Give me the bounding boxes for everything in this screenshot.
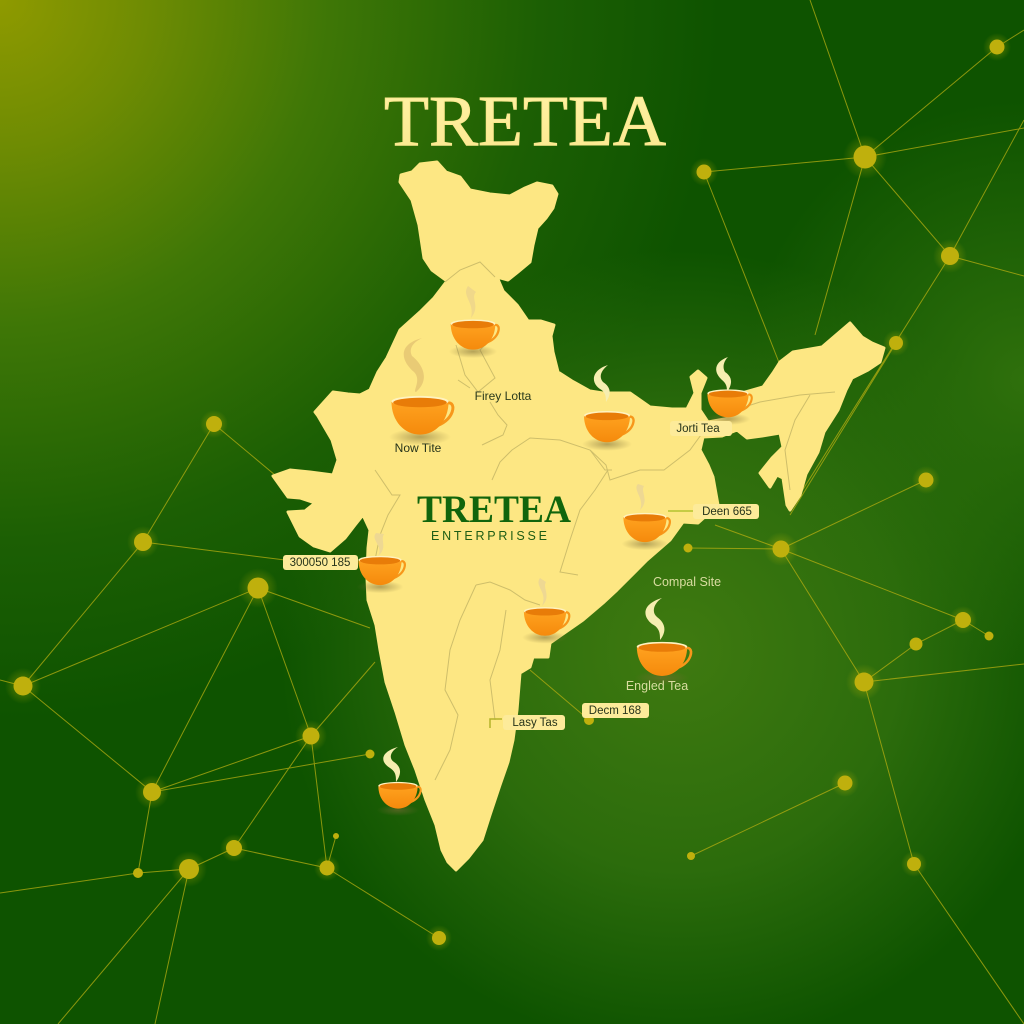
center logo: TRETEA bbox=[417, 488, 571, 531]
state borders bbox=[375, 262, 835, 780]
tea cup: Now Tite bbox=[389, 338, 453, 455]
label: 300050 185: 300050 185 bbox=[290, 557, 350, 569]
tea cup: Deen 665 bbox=[622, 484, 759, 550]
label: Compal Site: Compal Site bbox=[653, 575, 721, 589]
label: Lasy Tas bbox=[490, 715, 565, 730]
label: Firey Lotta: Firey Lotta bbox=[475, 389, 532, 403]
label: Engled Tea: Engled Tea bbox=[626, 679, 688, 693]
label: Decm 168: Decm 168 bbox=[589, 705, 641, 717]
tea cup: Engled Tea bbox=[626, 575, 721, 693]
India map bbox=[273, 162, 884, 870]
label: Jorti Tea: Jorti Tea bbox=[676, 423, 720, 435]
network: lower right bbox=[530, 480, 1024, 1024]
title: TRETEA bbox=[384, 81, 666, 161]
label: Now Tite: Now Tite bbox=[395, 441, 442, 455]
tea cup: Andhra coast bbox=[522, 578, 569, 644]
tea cup: north bbox=[449, 286, 499, 358]
label: Lasy Tas: Lasy Tas bbox=[512, 717, 558, 729]
label: Deen 665: Deen 665 bbox=[702, 506, 752, 518]
network: left bbox=[0, 424, 439, 1024]
tea cup: east bbox=[582, 365, 634, 451]
tea cup: Jorti Tea bbox=[670, 357, 752, 436]
label: Decm 168 bbox=[582, 703, 649, 718]
tea cup: south west bbox=[377, 747, 421, 816]
network: upper right bbox=[704, 0, 1024, 515]
tea cup: west coast bbox=[283, 533, 405, 593]
center logo: ENTERPRISSE bbox=[431, 529, 547, 543]
